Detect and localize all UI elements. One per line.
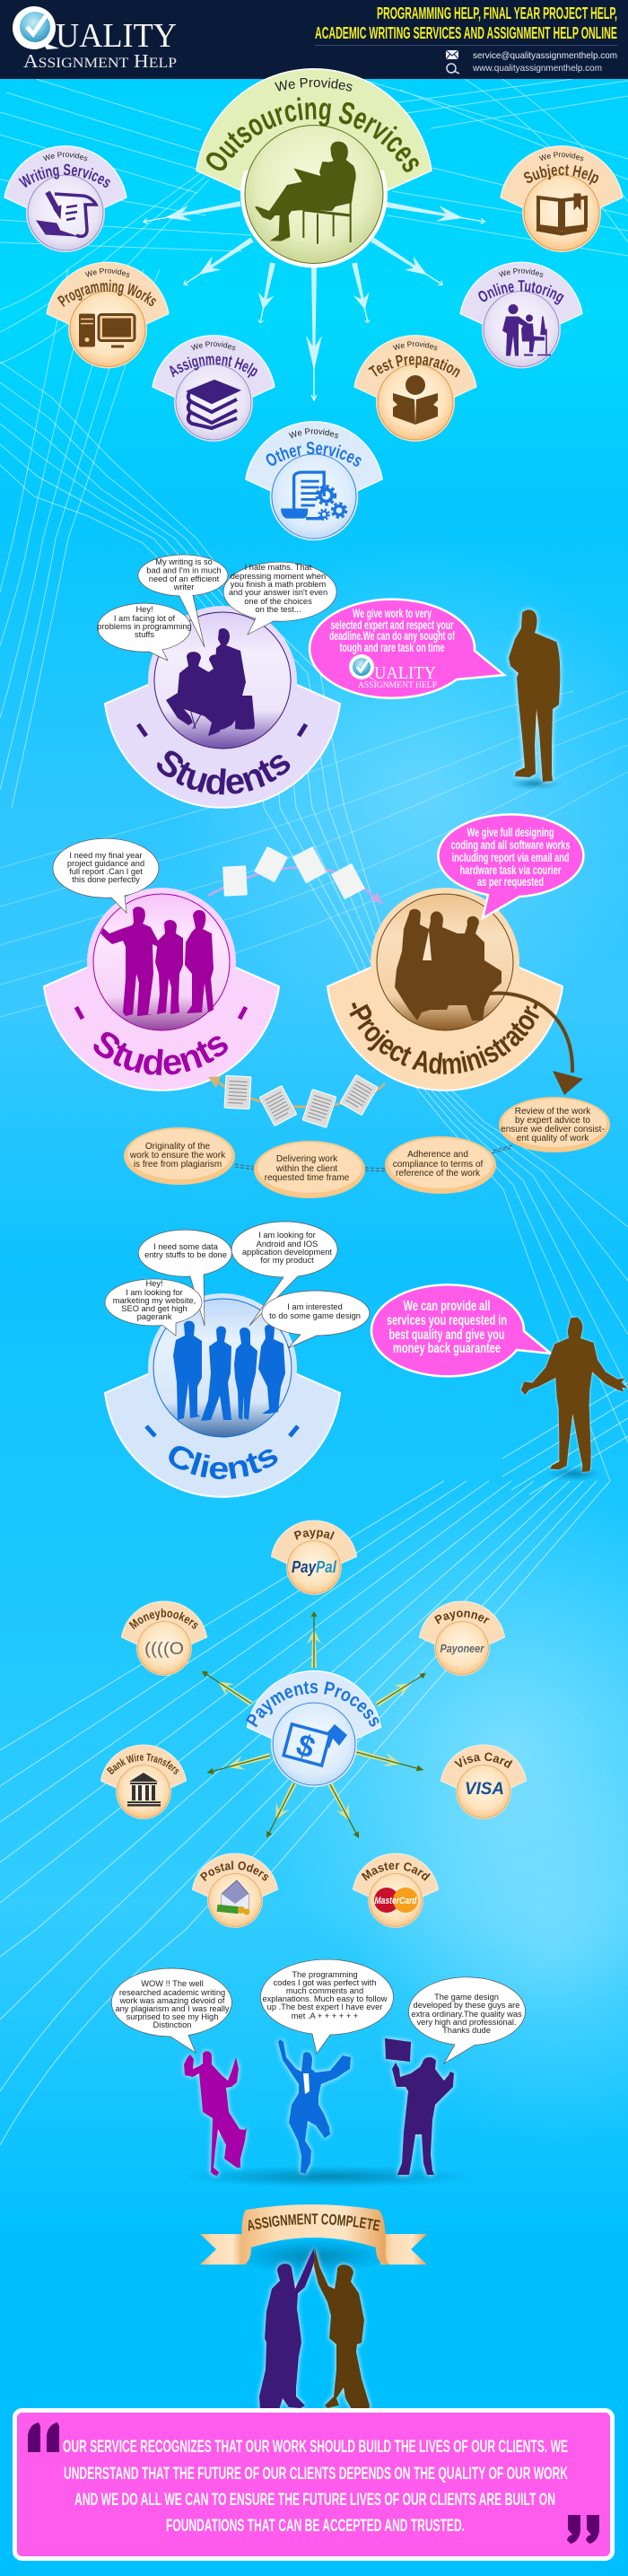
badge: other services [245, 421, 383, 540]
speech bubble: programming testimonial: met .A + + + + + + [292, 2011, 358, 2020]
logo: paypal: PayPal [292, 1558, 337, 1576]
ribbon: assignment complete [200, 2204, 427, 2273]
logo: visa: VISA [465, 1780, 504, 1799]
speech bubble: maths: one of the choices [244, 597, 312, 606]
badge: payonner [418, 1601, 506, 1676]
oval: delivery: within the client [275, 1164, 337, 1174]
speech bubble: programming testimonial: codes I got was perfect with [274, 1978, 376, 1987]
speech bubble: marketing: Hey! [145, 1279, 163, 1288]
arrow: papers from students to administrator [208, 846, 382, 904]
badge: postal orders: Postal Oders [199, 1861, 269, 1881]
badge: bank wire transfers: Bank Wire Transfers [106, 1754, 179, 1775]
callout: expert deadline promise: UALITY [374, 663, 436, 683]
speech bubble: app development: I am looking for [258, 1231, 316, 1240]
badge: online tutoring: Online Tutoring [478, 280, 564, 305]
callout: expert deadline promise [310, 600, 504, 698]
speech bubble: marketing [105, 1279, 202, 1336]
badge: online tutoring: We Provides [499, 268, 544, 277]
speech bubble: writing testimonial: any plagiarism and I was really [115, 2004, 230, 2013]
speech bubble: writing: writer [173, 583, 194, 591]
speech bubble: programming: Hey! [135, 605, 153, 614]
callout: full designing and coding [438, 814, 583, 918]
arrow: papers from administrator to students [208, 1074, 385, 1127]
badge: paypal: Paypal [294, 1529, 335, 1540]
speech bubble: game design testimonial [408, 1977, 525, 2063]
arrows around payments process [197, 1611, 430, 1842]
speech bubble: programming [97, 603, 192, 661]
speech bubble: maths: I hate maths. That [245, 563, 312, 572]
callout: full designing and coding: as per requested [477, 874, 544, 889]
speech bubble: game design testimonial: extra ordinary.The quality was [411, 2010, 522, 2019]
icon: opening quote mark [28, 2423, 59, 2452]
callout: full designing and coding: coding and all software works [450, 837, 571, 852]
badge: postal orders [192, 1853, 278, 1928]
ribbon: assignment complete: ASSIGNMENT COMPLETE [248, 2213, 380, 2231]
contact details [446, 50, 617, 74]
speech bubble: programming: I am facing lot of [114, 614, 176, 623]
speech bubble: final year project: I need my final year [69, 851, 143, 860]
figure: jumping blue client [278, 2039, 351, 2174]
logo: moneybookers: ((((O [144, 1640, 184, 1659]
oval: delivery [254, 1141, 365, 1198]
speech bubble: maths: depressing moment when [231, 572, 326, 581]
speech bubble: programming testimonial: explanations. Much easy to follow [262, 1994, 388, 2003]
badge: other services: We Provides [289, 428, 339, 438]
figure: purple client with box [385, 2038, 454, 2175]
logo: payoneer: Payoneer [440, 1642, 484, 1655]
badge: assignment help: Assignment Help [169, 355, 257, 379]
speech bubble: writing testimonial: WOW !! The well [141, 1979, 204, 1988]
speech bubble: game design testimonial: very high and professional. [416, 2018, 517, 2027]
speech bubble: maths [223, 562, 336, 635]
speech bubble: programming testimonial: up .The best expert I have ever [267, 2002, 382, 2011]
badge: visa card: Visa Card [454, 1752, 513, 1768]
badge: master card: Master Card [361, 1862, 431, 1881]
logo: UALITY [56, 17, 177, 55]
badge: moneybookers: Moneybookers [129, 1608, 197, 1630]
quality ovals [124, 1097, 610, 1198]
speech bubble: writing testimonial: surprised to see my High [126, 2012, 218, 2021]
speech bubble: marketing: SEO and get high [121, 1304, 188, 1313]
closing statement text: FOUNDATIONS THAT CAN BE ACCEPTED AND TRUSTED. [166, 2517, 465, 2536]
icon: envelope and money [217, 1880, 249, 1915]
badge: programming works: Programming Works [57, 280, 156, 307]
callout: full designing and coding: hardware task via courier [459, 863, 562, 877]
oval: review: by expert advice to [515, 1116, 590, 1126]
logo [13, 6, 177, 72]
oval: adherence [385, 1136, 496, 1194]
badge: paypal [271, 1520, 357, 1595]
badge: other services: Other Services [266, 442, 362, 467]
icon: three students [166, 628, 255, 736]
badge: payments process [246, 1670, 382, 1788]
callout: expert deadline promise: deadline.We can do any sought of [329, 628, 455, 643]
figure: high five [259, 2248, 370, 2411]
arrow: administrator to expert review [483, 994, 583, 1095]
badge: online tutoring [459, 262, 583, 368]
panel: students requesting project: Students [93, 1032, 228, 1075]
icon: money in hand: $ [292, 1728, 319, 1766]
badge: subject help [500, 145, 624, 252]
speech bubble: data entry: entry stuffs to be done [144, 1250, 227, 1259]
speech bubble: final year project: this done perfectly [72, 875, 140, 884]
panel: students who need help [104, 606, 341, 809]
callout: full designing and coding: including report via email and [452, 850, 569, 864]
oval: review: Review of the work [515, 1107, 591, 1117]
speech bubble: writing: bad and I'm in much [146, 565, 222, 574]
speech bubble: game design testimonial: developed by these guys are [414, 2001, 519, 2010]
oval: delivery: Delivering work [276, 1154, 338, 1164]
callout: money back guarantee: money back guarantee [393, 1341, 501, 1356]
speech bubble: writing: need of an efficient [149, 574, 220, 583]
panel: closing quote [14, 2411, 612, 2558]
panel: clients: Clients [169, 1446, 278, 1479]
speech bubble: final year project [53, 838, 159, 913]
speech bubble: app development: Android and IOS [257, 1240, 318, 1249]
speech bubble: app development [231, 1222, 337, 1326]
oval: adherence: reference of the work [396, 1169, 481, 1178]
callout: money back guarantee: We can provide all [404, 1299, 490, 1314]
callout: expert deadline promise: We give work to very [353, 606, 432, 620]
main badge: outsourcing services: Outsourcing Services [206, 97, 419, 172]
speech bubble: maths: on the test... [255, 605, 301, 614]
badge: programming works: We Provides [84, 268, 129, 277]
icon: document and gears [281, 472, 346, 520]
callout: money back guarantee: services you requested in [387, 1313, 507, 1328]
speech bubble: maths: and your answer isn't even [229, 588, 327, 597]
oval: adherence: compliance to terms of [393, 1160, 484, 1170]
icon: open book [536, 194, 587, 233]
speech bubble: programming: stuffs [135, 630, 154, 639]
speech bubble: data entry: I need some data [153, 1242, 219, 1251]
speech bubble: app development: for my product [260, 1256, 314, 1265]
icon: three people talking [100, 907, 214, 1016]
contact details: service@qualityassignmenthelp.com [473, 50, 617, 61]
speech bubble: game design: to do some game design [269, 1311, 361, 1320]
speech bubble: maths: you finish a math problem [231, 580, 326, 589]
badge: assignment help [152, 335, 275, 442]
callout: money back guarantee [371, 1284, 551, 1376]
speech bubble: app development: application development [242, 1248, 333, 1257]
speech bubble: marketing: pagerank [137, 1312, 172, 1321]
badge: writing services: We Provides [43, 153, 88, 162]
callout: full designing and coding: We give full designing [467, 825, 554, 839]
badge: moneybookers [120, 1601, 208, 1676]
tagline [315, 4, 617, 46]
oval: review: ent quality of work [517, 1134, 589, 1143]
badge: test preparation: We Provides [393, 341, 438, 350]
speech bubble: marketing: I am looking for [126, 1288, 183, 1297]
badge: subject help: We Provides [538, 153, 583, 162]
panel: students requesting project [43, 888, 280, 1091]
speech bubble: marketing: marketing my website, [113, 1296, 196, 1305]
badge: payonner: Payonner [434, 1610, 490, 1625]
speech bubble: programming testimonial [260, 1959, 393, 2054]
speech bubble: game design [262, 1291, 370, 1348]
badge: bank wire transfers [100, 1745, 187, 1819]
figure: man thinking [509, 609, 560, 790]
speech bubble: writing [138, 555, 228, 647]
badge: writing services: Writing Services [18, 163, 110, 188]
speech bubble: writing: My writing is so [155, 557, 213, 566]
icon: bank building [127, 1773, 161, 1806]
callout: expert deadline promise: tough and rare task on time [339, 640, 445, 654]
arrows from outsourcing services [142, 196, 486, 400]
speech bubble: writing testimonial [111, 1968, 231, 2053]
callout: money back guarantee: best quality and give you [389, 1327, 504, 1343]
logo: ASSIGNMENT HELP [23, 50, 177, 72]
badge: master card [352, 1853, 439, 1928]
oval: review [499, 1097, 610, 1152]
oval: originality [124, 1127, 235, 1185]
icon: tutor with student at computer [502, 304, 551, 355]
panel: project administrator [327, 888, 563, 1091]
badge: subject help: Subject Help [524, 164, 599, 185]
oval: review: ensure we deliver consist- [501, 1125, 605, 1135]
speech bubble: data entry [138, 1230, 231, 1326]
icon: money in hand [283, 1724, 347, 1766]
speech bubble: writing testimonial: researched academic writing [119, 1988, 225, 1997]
panel: clients [104, 1293, 341, 1498]
speech bubble: final year project: full report .Can I get [69, 867, 143, 876]
badge: test preparation [353, 335, 477, 442]
icon: seated man reading [255, 142, 356, 244]
contact details: www.qualityassignmenthelp.com [472, 63, 602, 74]
speech bubble: writing testimonial: Distinction [153, 2020, 191, 2029]
oval: delivery: requested time frame [265, 1173, 350, 1183]
logo: mastercard: MasterCard [375, 1896, 417, 1906]
icon: stack of books [188, 381, 237, 428]
header bar [0, 0, 628, 79]
badge: visa card [440, 1745, 527, 1819]
icon: desktop computer [79, 314, 135, 348]
figure: man with open arms [521, 1317, 627, 1481]
icon: three seated administrators [395, 909, 502, 1021]
speech bubble: game design testimonial: The game design [434, 1993, 499, 2002]
icon: four clients [173, 1321, 285, 1421]
badge: test preparation: Test Preparation [368, 355, 460, 378]
callout: expert deadline promise: ASSIGNMENT HELP [358, 680, 437, 689]
badge: assignment help: We Provides [190, 341, 235, 350]
speech bubble: programming testimonial: The programming [292, 1970, 358, 1979]
panel: project administrator: -Project Administrator- [349, 1002, 540, 1074]
speech bubble: writing testimonial: work was amazing devoid of [119, 1996, 225, 2005]
oval: originality: is free from plagiarism [134, 1160, 222, 1170]
badge: payments process: Payments Process [246, 1681, 379, 1727]
speech bubble: game design testimonial: Thanks dude [442, 2026, 491, 2035]
oval: originality: Originality of the [145, 1142, 211, 1152]
main badge: outsourcing services: We Provides [275, 77, 353, 92]
speech bubble: programming: problems in programming [97, 622, 192, 631]
speech bubble: programming testimonial: much comments and [286, 1986, 363, 1995]
icon: person reading [393, 375, 438, 425]
badge: writing services [4, 145, 127, 252]
badge: programming works [46, 262, 170, 368]
icon: pen and scroll [37, 192, 96, 236]
testimonial group shadow [180, 2166, 476, 2187]
figure: happy magenta client [184, 2051, 247, 2176]
oval: adherence: Adherence and [407, 1150, 468, 1160]
oval: originality: work to ensure the work [129, 1151, 226, 1161]
speech bubble: final year project: project guidance and [67, 859, 144, 868]
closing statement text [63, 2438, 568, 2536]
main badge: outsourcing services [196, 68, 432, 267]
speech bubble: game design: I am interested [287, 1302, 343, 1311]
icon: closing quote mark [567, 2515, 599, 2544]
callout: expert deadline promise: selected expert and respect your [330, 618, 454, 632]
panel: students who need help: Students [157, 750, 291, 795]
